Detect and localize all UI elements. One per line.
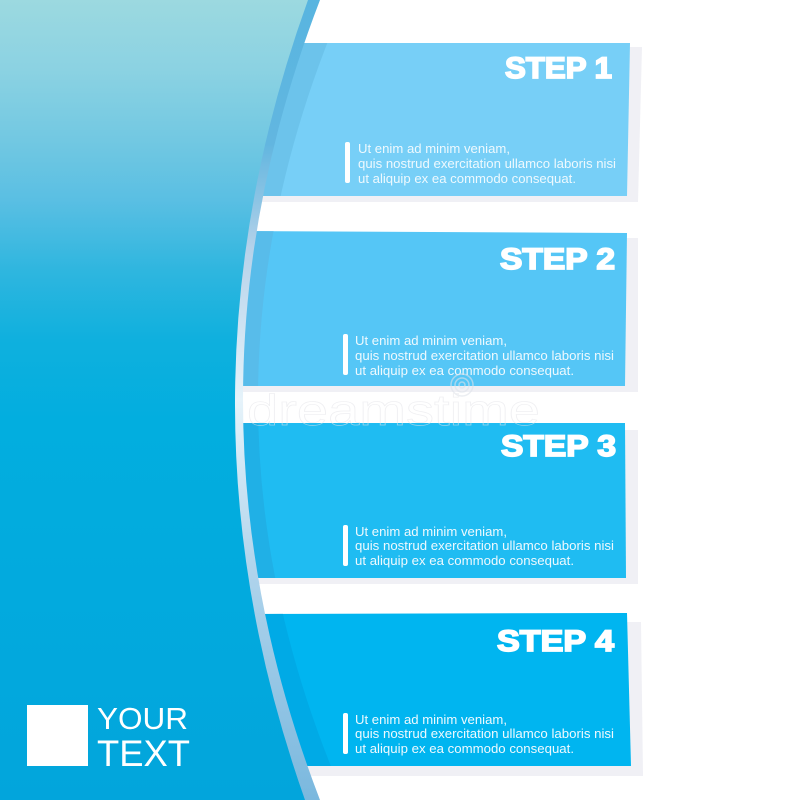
logo placeholder bbox=[27, 701, 190, 774]
text accent bar: step 2 bbox=[343, 334, 348, 375]
text block: step 3: Ut enim ad minim veniam, bbox=[355, 524, 507, 539]
logo square bbox=[27, 705, 88, 766]
heading: step 1: STEP 1 bbox=[505, 52, 612, 85]
panel: step 3 bbox=[230, 423, 638, 584]
text block: step 3 bbox=[355, 524, 614, 568]
card: step 3 bbox=[230, 423, 626, 578]
text block: step 4 bbox=[355, 712, 614, 756]
text accent bar: step 4 bbox=[343, 713, 348, 754]
logo text bbox=[97, 701, 190, 774]
heading: step 2: STEP 2 bbox=[500, 243, 615, 276]
card shadow: step 1 bbox=[230, 47, 642, 202]
watermark wordmark: dreamstime bbox=[247, 386, 540, 435]
card curved tint: step 1 bbox=[264, 43, 327, 196]
text block: step 4: ut aliquip ex ea commodo consequat. bbox=[355, 741, 574, 756]
panel: step 4 bbox=[230, 613, 643, 776]
card curved tint: step 4 bbox=[265, 614, 330, 766]
card shadow: step 2 bbox=[230, 238, 638, 392]
curved band bbox=[200, 0, 320, 800]
panel: step 2 bbox=[230, 231, 638, 392]
card shadow: step 4 bbox=[230, 622, 643, 776]
text block: step 1: ut aliquip ex ea commodo consequat. bbox=[358, 171, 576, 186]
text block: step 1: quis nostrud exercitation ullamco laboris nisi bbox=[358, 156, 616, 171]
text block: step 2 bbox=[355, 333, 614, 378]
text block: step 3: quis nostrud exercitation ullamco laboris nisi bbox=[355, 538, 614, 553]
card: step 1 bbox=[230, 43, 630, 196]
logo text: YOUR bbox=[97, 701, 188, 736]
card curved tint: step 2 bbox=[243, 231, 274, 386]
card: step 2 bbox=[230, 231, 627, 386]
logo text: TEXT bbox=[97, 733, 190, 774]
text block: step 4: Ut enim ad minim veniam, bbox=[355, 712, 507, 727]
watermark bbox=[247, 374, 540, 435]
text accent bar: step 1 bbox=[345, 142, 350, 183]
text block: step 1: Ut enim ad minim veniam, bbox=[358, 141, 510, 156]
text block: step 1 bbox=[358, 141, 616, 186]
watermark spiral logo bbox=[451, 374, 473, 396]
text block: step 4: quis nostrud exercitation ullamco laboris nisi bbox=[355, 726, 614, 741]
panel: step 1 bbox=[230, 43, 642, 202]
text accent bar: step 3 bbox=[343, 525, 348, 566]
text block: step 2: ut aliquip ex ea commodo consequat. bbox=[355, 363, 574, 378]
card: step 4 bbox=[230, 613, 631, 766]
left gradient panel bbox=[0, 0, 308, 800]
text block: step 2: quis nostrud exercitation ullamco laboris nisi bbox=[355, 348, 614, 363]
text block: step 3: ut aliquip ex ea commodo consequat. bbox=[355, 553, 574, 568]
text block: step 2: Ut enim ad minim veniam, bbox=[355, 333, 507, 348]
card shadow: step 3 bbox=[230, 430, 638, 584]
heading: step 4: STEP 4 bbox=[497, 625, 614, 658]
card curved tint: step 3 bbox=[244, 423, 275, 578]
heading: step 3: STEP 3 bbox=[501, 430, 616, 463]
